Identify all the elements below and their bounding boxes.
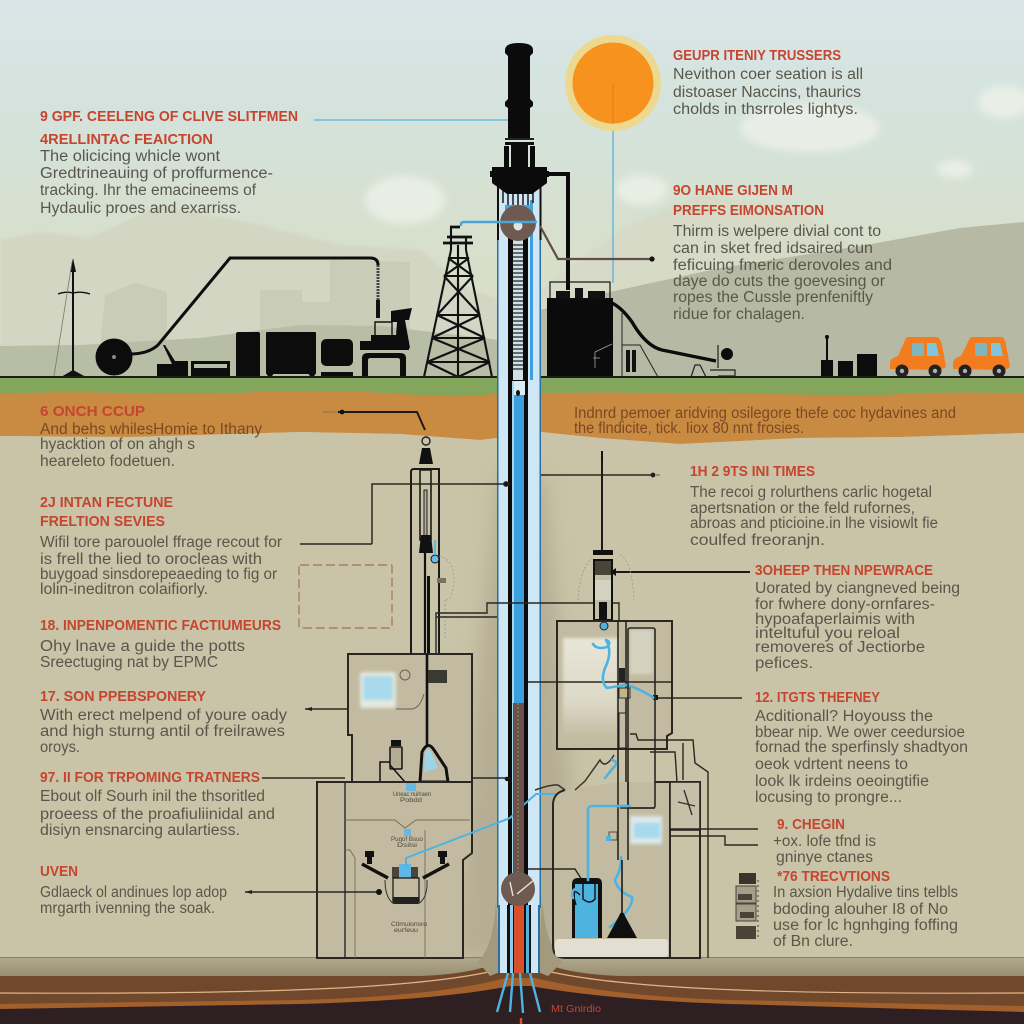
clouds	[196, 86, 1024, 251]
valve disc	[461, 205, 537, 241]
packer disc	[501, 872, 535, 906]
text: right underground block 5: bdoding alouher I8 of No	[773, 901, 948, 918]
text: right underground block 2: inteltuful you reloal	[755, 625, 900, 642]
power pole	[54, 258, 90, 377]
brown drill string	[513, 703, 524, 883]
text: left top heading block	[40, 108, 298, 217]
left lower cabinet: Dsilsi	[397, 843, 417, 849]
text: right second block: 9O HANE GIJEN M	[673, 182, 793, 199]
small stacked icons	[736, 873, 758, 939]
text: right underground block 2: for fwhere dony-ornfares-	[755, 596, 935, 613]
text: left top heading block: 4RELLINTAC FEAICTION	[40, 131, 213, 148]
text: right second block: PREFFS EIMONSATION	[673, 202, 824, 219]
text: right underground block 3: 12. ITGTS THEFNEY	[755, 689, 880, 706]
text: left underground block 5: proeess of the proafiuliinidal and	[40, 806, 275, 823]
text: left underground block 6: Gdlaeck ol andinues lop adop	[40, 884, 227, 901]
left lower cabinet: eurfeuu	[394, 928, 418, 934]
text: left underground block 6: mrgarth ivenning the soak.	[40, 900, 215, 917]
ladder tube	[509, 238, 527, 396]
text: right underground block 4: +ox. lofe tfnd is	[773, 833, 876, 850]
left upper cabinet	[305, 654, 472, 782]
text: right underground block 1: coulfed freoranjn.	[690, 532, 825, 549]
fracture lines	[497, 973, 540, 1024]
text: right second block: can in sket fred idsaired cun	[673, 240, 873, 257]
left lower cabinet: Ctlmuionsro	[391, 922, 428, 928]
text: left underground block 2: Wifil tore parouolel ffrage recout for	[40, 534, 282, 551]
text: right underground block 1	[690, 463, 938, 549]
text: left top heading block: Gredtrineauing of proffurmence-	[40, 165, 273, 182]
text: left top heading block: 9 GPF. CEELENG OF CLIVE SLITFMEN	[40, 108, 298, 125]
text: left underground block 5	[40, 769, 275, 839]
text: right underground block 3: look lk irdeins oeoingtifie	[755, 773, 929, 790]
text: left underground block 2: 2J INTAN FECTUNE	[40, 494, 173, 511]
text: right underground block 1: apertsnation or the feld rufornes,	[690, 500, 915, 517]
text: right underground block 2: pefices.	[755, 655, 813, 672]
text: left top heading block: The olicicing whicle wont	[40, 148, 221, 165]
text: orange layer note	[574, 405, 956, 437]
text: left underground block 1: hyacktion of on ahgh s	[40, 436, 195, 453]
main wellbore casing	[497, 178, 542, 908]
text: left underground block 5: 97. II FOR TRPOMING TRATNERS	[40, 769, 260, 786]
far equipment	[821, 335, 877, 377]
text: left top heading block: tracking. Ihr the emacineems of	[40, 182, 257, 199]
text: right underground block 2: 3OHEEP THEN NPEWRACE	[755, 562, 933, 579]
left lower cabinet: Puqof Bsuo	[391, 837, 424, 843]
text: orange layer note: the flndicite, tick. Iiox 80 nnt frosies.	[574, 420, 804, 437]
text: right underground block 3: Acditionall? Hoyouss the	[755, 708, 933, 725]
lattice tower	[424, 227, 492, 377]
text: left underground block 3: Sreectuging nat by EPMC	[40, 654, 218, 671]
text: right underground block 1: 1H 2 9TS INI TIMES	[690, 463, 815, 480]
text: left underground block 2	[40, 494, 282, 598]
left lower cabinet: Uneac nuihaen	[393, 792, 431, 798]
text: left underground block 2: lolin-ineditron colaifiorly.	[40, 581, 208, 598]
text: right top block: distoaser Naccins, thaurics	[673, 84, 861, 101]
text: left underground block 3: Ohy lnave a guide the potts	[40, 638, 245, 655]
text: left underground block 4: 17. SON PPEBSPONERY	[40, 688, 206, 705]
orange truck 1	[890, 337, 946, 378]
text: right underground block 2	[755, 562, 960, 672]
text: right underground block 2: Uorated by ciangneved being	[755, 580, 960, 597]
text: left underground block 1: heareleto fodetuen.	[40, 453, 175, 470]
text: right underground block 2: removeres of Jectiorbe	[755, 639, 925, 656]
leader lines below ground left	[300, 482, 619, 655]
text: left underground block 5: disiyn ensnarcing aulartiess.	[40, 822, 240, 839]
text: left underground block 6: UVEN	[40, 863, 78, 880]
text: right underground block 3	[755, 689, 968, 806]
orange truck 2	[953, 337, 1010, 378]
sky background	[0, 0, 1024, 380]
text: right underground block 1: abroas and pticioine.in lhe visiowlt fie	[690, 515, 938, 532]
text: right top block: cholds in thsrroles lightys.	[673, 101, 858, 118]
ground layers	[0, 377, 1024, 962]
cable reel and hose	[96, 258, 380, 376]
text: left underground block 2: FRELTION SEVIES	[40, 513, 165, 530]
left lower cabinet	[245, 777, 510, 958]
text: right underground block 2: hypoafaperlaimis with	[755, 611, 915, 628]
pump assembly	[362, 794, 560, 904]
text: right second block: Thirm is welpere divial cont to	[673, 223, 881, 240]
text: left underground block 4: With erect melpend of youre oady	[40, 707, 287, 724]
text: right underground block 3: fornad the sperfinsly shadtyon	[755, 739, 968, 756]
text: right second block: feficuing fmeric derovoles and	[673, 257, 892, 274]
text: right second block	[673, 182, 892, 323]
text: right second block: ropes the Cussle prenfeniftly	[673, 289, 873, 306]
right lower cabinet	[528, 628, 758, 958]
wellhead unit	[360, 308, 412, 376]
sun	[565, 35, 661, 131]
text: right underground block 4: gninye ctanes	[776, 849, 873, 866]
text: left underground block 4	[40, 688, 287, 756]
text: left underground block 3	[40, 617, 281, 671]
text: right second block: ridue for chalagen.	[673, 306, 805, 323]
text: right underground block 5: use for lc hgnhging foffing	[773, 917, 958, 934]
pipe and callout from valve	[540, 174, 655, 290]
left gauge assembly	[323, 410, 454, 654]
left lower cabinet: Pobdd	[400, 798, 422, 804]
text: left underground block 1: 6 ONCH CCUP	[40, 403, 145, 420]
text: left underground block 3: 18. INPENPOMENTIC FACTIUMEURS	[40, 617, 281, 634]
text: right underground block 3: locusing to prongre...	[755, 789, 902, 806]
black tank and hose	[547, 282, 735, 377]
wellbore flare	[498, 905, 540, 973]
label: bottom formation: Mt Gnirdio	[551, 1004, 601, 1015]
text: right underground block 3: oeok vdrtent neens to	[755, 756, 908, 773]
derrick stack	[490, 43, 549, 205]
bedrock strata	[0, 900, 1024, 1024]
ground line	[0, 376, 497, 378]
text: left underground block 2: buygoad sinsdorepeaeding to fig or	[40, 566, 277, 583]
text: right underground block 5: In axsion Hydalive tins telbls	[773, 884, 958, 901]
text: left underground block 5: Ebout olf Sourh inil the thsoritled	[40, 788, 265, 805]
text: left underground block 1: And behs whilesHomie to Ithany	[40, 421, 262, 438]
text: left underground block 4: oroys.	[40, 739, 80, 756]
text: orange layer note: Indnrd pemoer aridving osilegore thefe coc hydavines and	[574, 405, 956, 422]
text: right top block: Nevithon coer seation is all	[673, 66, 863, 83]
text: right underground block 3: bbear nip. We ower ceedursioe	[755, 724, 965, 741]
surface vehicles and tanks	[157, 332, 353, 377]
dashed callout box	[299, 565, 392, 628]
text: right underground block 5	[773, 868, 958, 950]
text: right underground block 5: *76 TRECVTIONS	[777, 868, 890, 885]
right ground line	[541, 376, 1024, 378]
text: right top block	[673, 47, 863, 118]
text: right top block: GEUPR ITENIY TRUSSERS	[673, 47, 841, 64]
right upper cabinet	[528, 621, 742, 782]
text: left underground block 6	[40, 863, 227, 917]
text: left underground block 2: is frell the lied to orocleas with	[40, 551, 262, 568]
text: left top heading block: Hydaulic proes and exarriss.	[40, 200, 241, 217]
text: right underground block 5: of Bn clure.	[773, 933, 853, 950]
text: right underground block 4	[773, 816, 876, 866]
text: right underground block 1: The recoi g rolurthens carlic hogetal	[690, 484, 932, 501]
distant hills and skyline	[0, 195, 1024, 378]
text: left underground block 4: and high sturng antil of freilrawes	[40, 723, 285, 740]
text: right second block: daye do cuts the goevesing or	[673, 273, 885, 290]
text: right underground block 4: 9. CHEGIN	[777, 816, 845, 833]
leader lines above ground	[314, 120, 613, 283]
blue tank	[572, 760, 637, 938]
text: left underground block 1	[40, 403, 262, 470]
right gauge assembly	[541, 451, 750, 622]
